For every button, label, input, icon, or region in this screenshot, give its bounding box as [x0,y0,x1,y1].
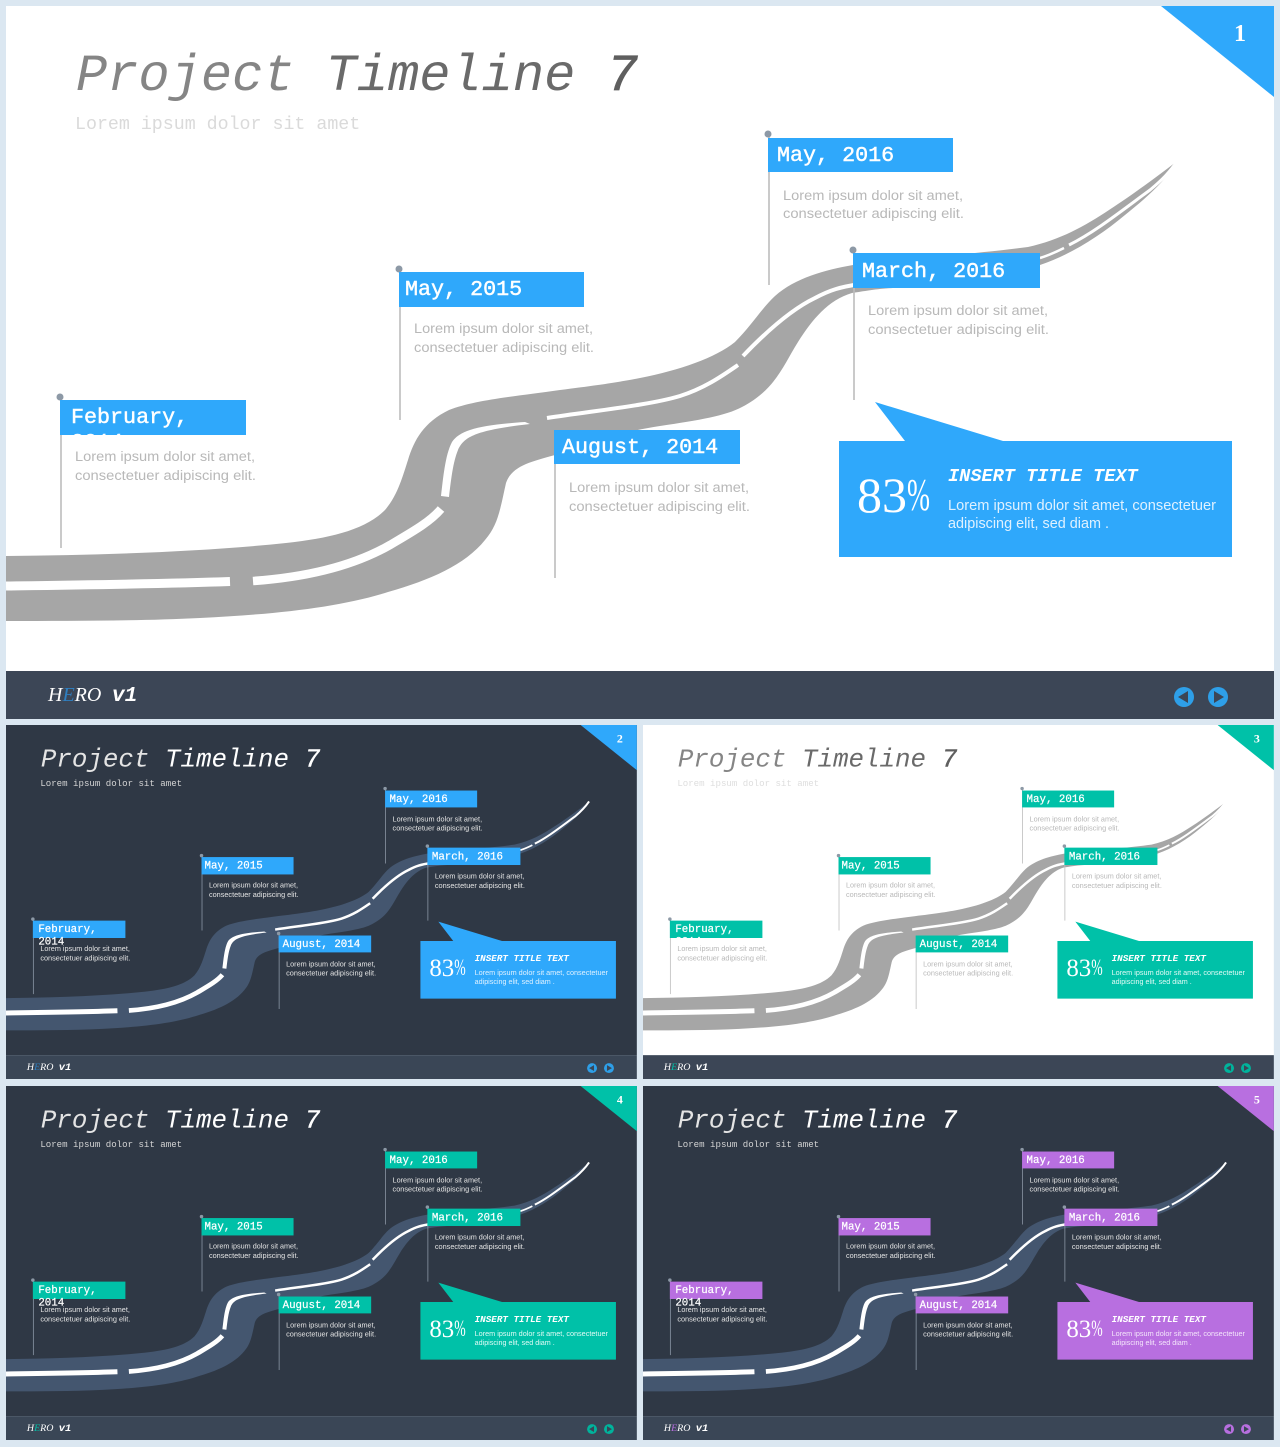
milestone: March, 2016: Lorem ipsum dolor sit amet, [435,1234,524,1241]
milestone: February, 2014: Lorem ipsum dolor sit amet, [40,946,130,953]
milestone: August, 2014: August, 2014 [920,1300,997,1312]
footer bar [6,671,1274,719]
milestone: May, 2015: Lorem ipsum dolor sit amet, [209,1243,298,1250]
milestone: March, 2016: March, 2016 [862,259,1005,284]
milestone: March, 2016: Lorem ipsum dolor sit amet, [1072,873,1161,880]
milestone: February, 2014: Lorem ipsum dolor sit amet, [40,1307,130,1314]
callout: 83%: 83 [429,1316,454,1343]
milestone: March, 2016 [1063,1205,1162,1282]
milestone: August, 2014: Lorem ipsum dolor sit amet, [286,1322,376,1329]
callout: 83%: adipiscing elit, sed diam . [948,516,1109,532]
milestone: August, 2014: August, 2014 [283,1300,360,1312]
milestone: February, 2014: February, [71,405,188,430]
callout: 83%: 83 [1066,955,1091,982]
milestone: August, 2014: consectetuer adipiscing elit. [569,499,750,515]
milestone: May, 2015 [837,854,936,931]
milestone: February, 2014: consectetuer adipiscing elit. [677,955,767,962]
footer bar: v1 [112,685,137,708]
milestone: February, 2014: February, [675,924,734,936]
callout: 83%: Lorem ipsum dolor sit amet, consectetuer [1112,1329,1246,1338]
milestone: August, 2014 [277,932,376,1009]
milestone: March, 2016: Lorem ipsum dolor sit amet, [1072,1234,1161,1241]
footer bar: HERO [26,1423,53,1434]
callout: 83% [1057,1283,1253,1360]
milestone: March, 2016 [850,246,1049,400]
callout: 83%: % [454,1316,466,1341]
milestone: May, 2016: Lorem ipsum dolor sit amet, [393,1177,482,1184]
milestone: May, 2016: Lorem ipsum dolor sit amet, [783,188,963,204]
milestone: February, 2014: 2014 [675,936,701,948]
callout: 83%: % [454,955,466,980]
footer bar: HERO [26,1062,53,1073]
milestone: March, 2016: consectetuer adipiscing elit. [868,322,1049,338]
road [6,801,589,1030]
milestone: February, 2014 [31,917,130,994]
milestone: February, 2014: Lorem ipsum dolor sit amet, [677,946,767,953]
milestone: May, 2016: May, 2016 [1027,1155,1085,1167]
milestone: August, 2014: consectetuer adipiscing elit. [286,1332,376,1339]
callout: 83% [839,402,1232,557]
milestone: May, 2015: Lorem ipsum dolor sit amet, [414,321,593,337]
milestone: March, 2016: March, 2016 [432,1213,503,1225]
footer bar: v1 [59,1423,71,1435]
footer bar: v1 [696,1062,708,1074]
title: Project Timeline 7 [41,1106,321,1136]
callout: 83%: 83 [1066,1316,1091,1343]
milestone: May, 2015: May, 2015 [405,277,522,302]
corner badge with page number: 4 [617,1092,623,1106]
slide 1: white and blue [6,6,1274,719]
milestone: May, 2015: consectetuer adipiscing elit. [209,1253,299,1260]
milestone: May, 2016 [1020,1148,1120,1225]
milestone: May, 2016: consectetuer adipiscing elit. [1030,1186,1120,1193]
milestone: March, 2016: March, 2016 [1069,852,1140,864]
milestone: May, 2016 [1020,787,1120,864]
milestone: May, 2015 [200,854,299,931]
road [6,160,1178,621]
slide 3 background [643,725,1274,1055]
corner badge with page number: 3 [1254,731,1260,745]
callout: 83%: INSERT TITLE TEXT [1112,953,1206,964]
corner badge with page number: 5 [1254,1092,1260,1106]
corner badge with page number [581,725,637,770]
milestone: May, 2016 [383,1148,483,1225]
milestone: May, 2016: Lorem ipsum dolor sit amet, [1030,1177,1119,1184]
milestone: August, 2014 [277,1293,376,1370]
subtitle: Lorem ipsum dolor sit amet [677,1139,819,1150]
milestone: March, 2016: consectetuer adipiscing elit. [435,883,525,890]
milestone: May, 2015: consectetuer adipiscing elit. [846,1253,936,1260]
footer bar: v1 [696,1423,708,1435]
footer bar: HERO [663,1062,690,1073]
milestone: May, 2016: May, 2016 [390,1155,448,1167]
subtitle: Lorem ipsum dolor sit amet [40,778,182,789]
milestone: May, 2015 [396,266,594,420]
callout: 83%: adipiscing elit, sed diam . [1112,1338,1192,1347]
footer bar: HERO [47,684,101,706]
milestone: February, 2014: 2014 [38,1297,64,1309]
milestone: February, 2014: February, [38,924,97,936]
footer bar: HERO [663,1423,690,1434]
milestone: August, 2014: August, 2014 [562,435,718,460]
milestone: February, 2014: 2014 [71,430,123,455]
milestone: May, 2016: consectetuer adipiscing elit. [393,1186,483,1193]
milestone: May, 2016: consectetuer adipiscing elit. [393,825,483,832]
corner badge with page number: 2 [617,731,623,745]
milestone: February, 2014 [668,917,767,994]
callout: 83%: adipiscing elit, sed diam . [475,1338,555,1347]
milestone: February, 2014: consectetuer adipiscing elit. [75,468,256,484]
slide 2 background [6,725,637,1055]
subtitle: Lorem ipsum dolor sit amet [75,115,360,135]
milestone: August, 2014: consectetuer adipiscing elit. [286,971,376,978]
corner badge with page number [1218,1086,1274,1131]
callout: 83%: Lorem ipsum dolor sit amet, consectetuer [475,968,609,977]
milestone: May, 2015: Lorem ipsum dolor sit amet, [209,882,298,889]
milestone: February, 2014: February, [38,1285,97,1297]
corner badge with page number [1218,725,1274,770]
milestone: March, 2016: consectetuer adipiscing elit. [1072,1244,1162,1251]
callout: 83% [420,1283,616,1360]
milestone: March, 2016: consectetuer adipiscing elit. [435,1244,525,1251]
milestone: March, 2016 [1063,844,1162,921]
milestone: August, 2014 [914,1293,1013,1370]
subtitle: Lorem ipsum dolor sit amet [677,778,819,789]
title: Project Timeline 7 [678,1106,958,1136]
callout: 83%: 83 [429,955,454,982]
milestone: March, 2016: March, 2016 [1069,1213,1140,1225]
milestone: March, 2016 [426,1205,525,1282]
milestone: May, 2016: Lorem ipsum dolor sit amet, [1030,816,1119,823]
milestone: May, 2015 [837,1215,936,1292]
milestone: May, 2015 [200,1215,299,1292]
footer bar [6,1416,637,1440]
title: Project Timeline 7 [41,745,321,775]
milestone: May, 2015: Lorem ipsum dolor sit amet, [846,1243,935,1250]
footer bar: v1 [59,1062,71,1074]
callout: 83% [1057,922,1253,999]
milestone: May, 2016 [764,130,964,285]
callout: 83%: INSERT TITLE TEXT [1112,1314,1206,1325]
milestone: February, 2014 [31,1278,130,1355]
callout: 83%: INSERT TITLE TEXT [948,466,1140,487]
milestone: August, 2014: consectetuer adipiscing elit. [923,1332,1013,1339]
milestone: February, 2014: Lorem ipsum dolor sit amet, [75,449,255,465]
milestone: May, 2016: consectetuer adipiscing elit. [783,206,964,222]
milestone: March, 2016: consectetuer adipiscing elit. [1072,883,1162,890]
milestone: May, 2016: consectetuer adipiscing elit. [1030,825,1120,832]
callout: 83%: adipiscing elit, sed diam . [475,977,555,986]
slide 5: dark and purple [643,1086,1274,1440]
callout: 83%: % [907,469,930,520]
milestone: May, 2015: consectetuer adipiscing elit. [846,892,936,899]
milestone: May, 2015: May, 2015 [205,860,263,872]
slide 4: dark and teal [6,1086,637,1440]
title: Project Timeline 7 [678,745,958,775]
callout: 83%: Lorem ipsum dolor sit amet, consectetuer [948,498,1216,514]
milestone: May, 2016: May, 2016 [390,794,448,806]
callout: 83% [420,922,616,999]
slide 2: dark and blue [6,725,637,1079]
milestone: August, 2014: Lorem ipsum dolor sit amet, [923,1322,1013,1329]
milestone: February, 2014: 2014 [675,1297,701,1309]
milestone: May, 2016: May, 2016 [777,143,894,168]
footer bar [643,1416,1274,1440]
road [643,1162,1226,1391]
footer bar [643,1055,1274,1079]
milestone: February, 2014: consectetuer adipiscing elit. [677,1316,767,1323]
milestone: May, 2015: May, 2015 [842,860,900,872]
callout: 83%: adipiscing elit, sed diam . [1112,977,1192,986]
milestone: August, 2014: August, 2014 [283,939,360,951]
callout: 83%: INSERT TITLE TEXT [475,953,569,964]
subtitle: Lorem ipsum dolor sit amet [40,1139,182,1150]
footer bar [6,1055,637,1079]
slide 5 background [643,1086,1274,1416]
callout: 83%: 83 [857,467,907,523]
milestone: August, 2014 [554,430,750,578]
road [6,1162,589,1391]
road [643,801,1226,1030]
milestone: March, 2016: Lorem ipsum dolor sit amet, [435,873,524,880]
milestone: August, 2014: Lorem ipsum dolor sit amet, [923,961,1013,968]
callout: 83%: Lorem ipsum dolor sit amet, consectetuer [1112,968,1246,977]
milestone: August, 2014: Lorem ipsum dolor sit amet, [569,480,749,496]
milestone: August, 2014: consectetuer adipiscing elit. [923,971,1013,978]
milestone: February, 2014: Lorem ipsum dolor sit amet, [677,1307,767,1314]
milestone: February, 2014 [668,1278,767,1355]
corner badge with page number: 1 [1234,21,1246,47]
milestone: May, 2015: May, 2015 [842,1221,900,1233]
milestone: August, 2014: Lorem ipsum dolor sit amet, [286,961,376,968]
milestone: March, 2016: Lorem ipsum dolor sit amet, [868,303,1048,319]
title: Project Timeline 7 [76,47,638,106]
milestone: March, 2016: March, 2016 [432,852,503,864]
corner badge with page number [581,1086,637,1131]
milestone: February, 2014: February, [675,1285,734,1297]
milestone: May, 2015: Lorem ipsum dolor sit amet, [846,882,935,889]
callout: 83%: INSERT TITLE TEXT [475,1314,569,1325]
milestone: May, 2015: May, 2015 [205,1221,263,1233]
milestone: February, 2014: 2014 [38,936,64,948]
milestone: March, 2016 [426,844,525,921]
milestone: August, 2014: August, 2014 [920,939,997,951]
slide 4 background [6,1086,637,1416]
slide 3: white and teal [643,725,1274,1079]
milestone: May, 2015: consectetuer adipiscing elit. [209,892,299,899]
milestone: May, 2016 [383,787,483,864]
corner badge with page number [1161,6,1274,97]
slide 1 background [6,6,1274,671]
milestone: August, 2014 [916,936,1013,1009]
milestone: May, 2015: consectetuer adipiscing elit. [414,340,594,356]
milestone: February, 2014: consectetuer adipiscing elit. [40,1316,130,1323]
callout: 83%: % [1091,955,1103,980]
milestone: February, 2014 [56,394,256,548]
milestone: May, 2016: Lorem ipsum dolor sit amet, [393,816,482,823]
milestone: February, 2014: consectetuer adipiscing elit. [40,955,130,962]
milestone: May, 2016: May, 2016 [1027,794,1085,806]
callout: 83%: Lorem ipsum dolor sit amet, consectetuer [475,1329,609,1338]
callout: 83%: % [1091,1316,1103,1341]
